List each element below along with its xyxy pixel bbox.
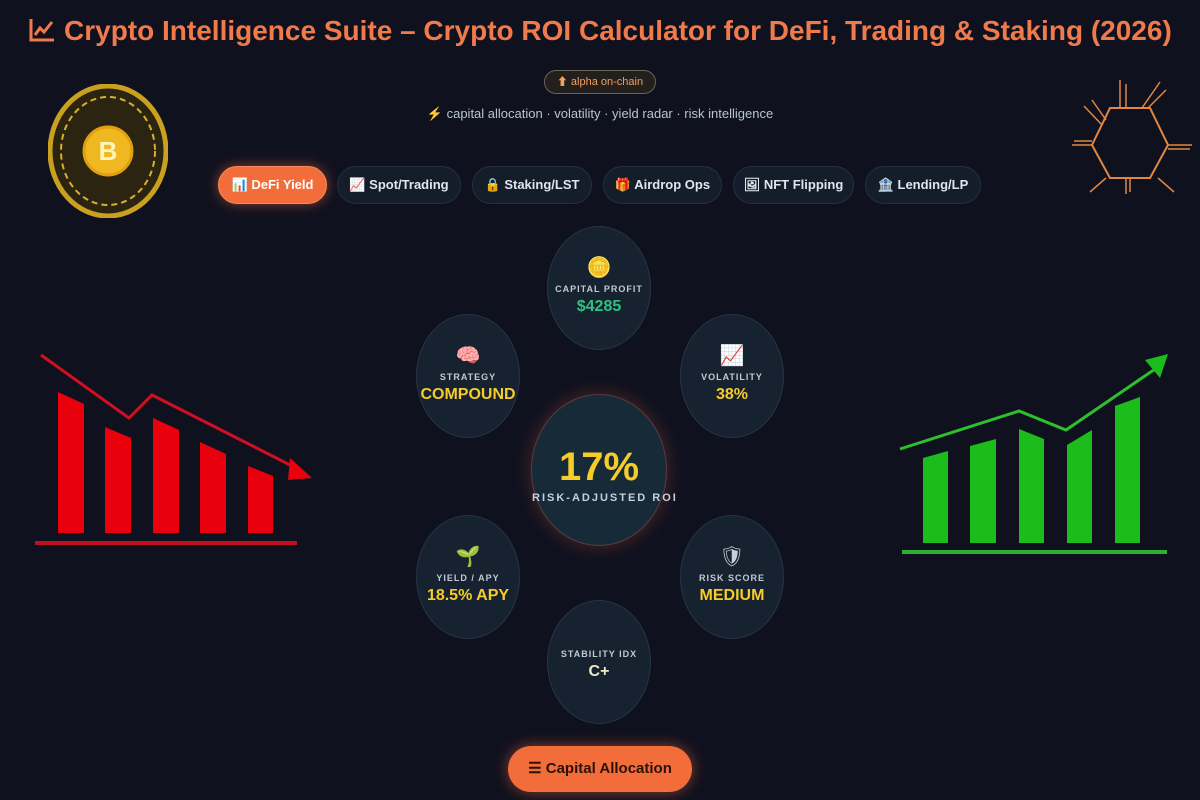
node: center ROI: RISK-ADJUSTED ROI xyxy=(532,492,678,504)
button: capital allocation: ☰ Capital Allocation xyxy=(528,760,672,777)
chart: green rising xyxy=(900,354,1168,554)
tab: NFT Flipping xyxy=(733,166,854,204)
tab: NFT Flipping: 🖼 NFT Flipping xyxy=(744,177,843,192)
node: strategy: 🧠 xyxy=(456,345,480,367)
node: risk score: MEDIUM xyxy=(700,587,764,604)
tab: Staking/LST xyxy=(472,166,592,204)
subtitle: ⚡ capital allocation · volatility · yield radar · risk intelligence xyxy=(427,106,773,121)
node: stability: STABILITY IDX xyxy=(561,649,637,659)
tab: DeFi Yield: 📊 DeFi Yield xyxy=(232,177,313,192)
node: yield: YIELD / APY xyxy=(436,573,500,583)
node: capital profit: CAPITAL PROFIT xyxy=(555,284,643,294)
tabs xyxy=(210,158,981,212)
node: risk score: RISK SCORE xyxy=(699,573,765,583)
icon: bitcoin coin xyxy=(48,84,168,218)
tab: Lending/LP: 🏦 Lending/LP xyxy=(878,177,968,192)
icon: bitcoin coin: B xyxy=(99,136,117,166)
node: volatility: 📈 xyxy=(720,345,744,367)
tab: Airdrop Ops xyxy=(603,166,722,204)
node: strategy xyxy=(416,314,520,438)
node: strategy: COMPOUND xyxy=(420,386,516,403)
button: capital allocation xyxy=(508,746,692,792)
tab: Airdrop Ops: 🎁 Airdrop Ops xyxy=(615,177,710,192)
tab: Spot/Trading: 📈 Spot/Trading xyxy=(349,177,449,192)
node: capital profit: 🪙 xyxy=(587,257,611,279)
icon: circuit hexagon xyxy=(1072,80,1192,194)
node: center ROI xyxy=(531,394,667,546)
node: volatility xyxy=(680,314,784,438)
node: strategy: STRATEGY xyxy=(440,372,496,382)
node: volatility: 38% xyxy=(716,386,748,403)
badge: ⬆ alpha on-chain xyxy=(557,76,643,88)
node: center ROI: 17% xyxy=(559,445,639,489)
node: yield xyxy=(416,515,520,639)
node: stability: C+ xyxy=(589,663,609,680)
node: volatility: VOLATILITY xyxy=(701,372,763,382)
tab: Staking/LST: 🔒 Staking/LST xyxy=(485,177,579,192)
node: risk score xyxy=(680,515,784,639)
node: yield: 18.5% APY xyxy=(427,587,509,604)
tab: Lending/LP xyxy=(865,166,981,204)
tab: Spot/Trading xyxy=(337,166,461,204)
node: stability xyxy=(547,600,651,724)
tab: DeFi Yield xyxy=(218,166,327,204)
title: Crypto Intelligence Suite – Crypto ROI Calculator for DeFi, Trading & Staking (2026) xyxy=(64,15,1172,46)
badge xyxy=(544,70,656,94)
node: capital profit xyxy=(547,226,651,350)
node: yield: 🌱 xyxy=(456,546,480,568)
chart: red declining xyxy=(35,354,312,545)
node: risk score: 🛡 xyxy=(719,546,745,568)
node: capital profit: $4285 xyxy=(577,298,621,315)
